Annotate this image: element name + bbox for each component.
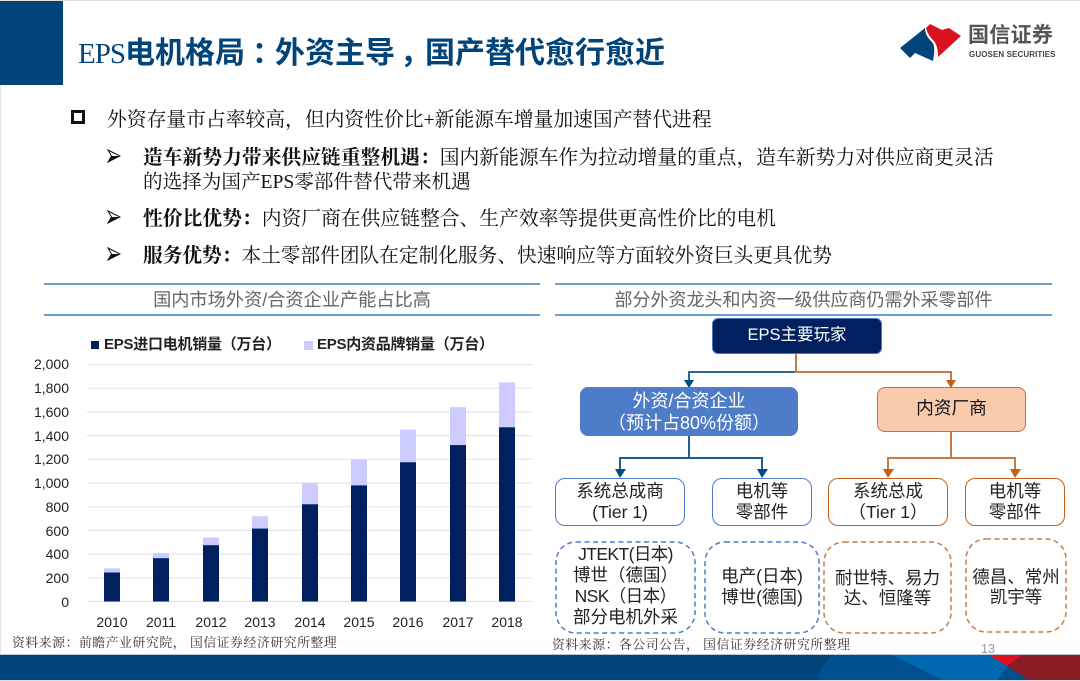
dashed box: domestic tier 1 suppliers: 耐世特、易力 <box>835 568 940 588</box>
y axis labels: 1,200 <box>34 451 69 467</box>
footer band <box>0 654 1080 681</box>
dashed box: foreign tier 1 suppliers: 部分电机外采 <box>573 607 678 627</box>
domestic brand bars <box>104 382 515 602</box>
sub-bullet 1 text: 造车新势力带来供应链重整机遇：国内新能源车作为拉动增量的重点，造车新势力对供应商更灵活 <box>143 147 994 169</box>
box: motor parts domestic: 电机等 <box>989 481 1041 501</box>
dashed box: foreign tier 1 suppliers: NSK（日本） <box>575 586 676 606</box>
box: EPS main players: EPS主要玩家 <box>747 326 847 344</box>
chart legend <box>91 335 494 353</box>
dashed box: domestic motor suppliers <box>965 538 1067 633</box>
dashed box: foreign motor suppliers: 电产(日本) <box>721 566 803 586</box>
x axis labels <box>96 614 523 630</box>
dashed box: foreign motor suppliers: 博世(德国) <box>721 587 803 607</box>
main bullet text: 外资存量市占率较高，但内资性价比+新能源车增量加速国产替代进程 <box>107 109 712 131</box>
sub-bullet 1 arrow <box>107 149 121 163</box>
y axis labels: 200 <box>46 570 69 586</box>
box: system integrator tier 1 foreign <box>555 478 685 526</box>
x axis labels: 2011 <box>146 614 176 630</box>
x axis labels: 2014 <box>294 614 326 630</box>
chart gridlines <box>87 364 532 602</box>
x axis labels: 2015 <box>343 614 375 630</box>
box: domestic makers <box>877 387 1026 432</box>
title: ： <box>252 28 282 72</box>
logo subtitle: GUOSEN SECURITIES <box>969 50 1056 59</box>
y axis labels: 600 <box>46 523 69 539</box>
arrowheads <box>615 380 1021 478</box>
box: foreign and joint ventures: （预计占80%份额） <box>608 413 770 433</box>
y axis labels: 0 <box>61 594 69 610</box>
imported motor bars <box>104 427 515 602</box>
y axis labels: 400 <box>46 546 69 562</box>
title: ， <box>400 28 430 72</box>
box: system integrator tier 1 domestic: 系统总成 <box>853 481 923 501</box>
sub-bullet 1 text: 的选择为国产EPS零部件替代带来机遇 <box>143 172 471 193</box>
title: EPS电机格局 外资主导 国产替代愈行愈近 <box>78 28 665 72</box>
box: motor parts foreign <box>712 478 812 526</box>
chart legend: EPS进口电机销量（万台） <box>104 335 281 353</box>
dashed box: domestic tier 1 suppliers <box>823 541 952 634</box>
sub-bullet 2 arrow <box>107 210 121 224</box>
box: foreign and joint ventures: 外资/合资企业 <box>632 391 746 411</box>
header blue block <box>0 1 63 85</box>
box: motor parts domestic: 零部件 <box>989 502 1041 522</box>
x axis labels: 2010 <box>96 614 128 630</box>
sub-bullet 1 text <box>143 146 994 193</box>
y axis labels: 1,800 <box>34 380 69 396</box>
connector: top to foreign <box>689 372 796 387</box>
connector: foreign to children <box>620 435 762 474</box>
right source note: 资料来源：各公司公告， 国信证券经济研究所整理 <box>552 638 851 652</box>
y axis labels: 2,000 <box>34 356 69 372</box>
box: system integrator tier 1 foreign: 系统总成商 <box>576 481 664 501</box>
box: system integrator tier 1 foreign: (Tier 1) <box>592 502 648 522</box>
stacked bar chart <box>34 335 532 630</box>
right panel heading <box>555 283 1052 316</box>
dashed box: domestic tier 1 suppliers: 达、恒隆等 <box>844 588 931 608</box>
dashed box: foreign tier 1 suppliers <box>555 541 696 634</box>
logo wordmark: 国信证券 <box>968 24 1053 47</box>
x axis labels: 2012 <box>195 614 227 630</box>
connector: top to domestic <box>796 353 951 387</box>
y axis labels: 1,600 <box>34 404 69 420</box>
left panel heading <box>44 283 540 316</box>
chart legend: EPS内资品牌销量（万台） <box>317 335 494 353</box>
x axis labels: 2016 <box>392 614 424 630</box>
y axis labels: 1,400 <box>34 428 69 444</box>
left source note: 资料来源：前瞻产业研究院， 国信证券经济研究所整理 <box>12 636 337 650</box>
sub-bullet 3 text: 服务优势：本土零部件团队在定制化服务、快速响应等方面较外资巨头更具优势 <box>143 245 832 267</box>
box: motor parts foreign: 电机等 <box>736 481 788 501</box>
left panel heading: 国内市场外资/合资企业产能占比高 <box>153 290 431 310</box>
page number: 13 <box>981 642 995 656</box>
connector: domestic to children <box>888 431 1015 474</box>
box: EPS main players <box>712 318 882 354</box>
box: motor parts foreign: 零部件 <box>736 502 788 522</box>
y axis labels: 800 <box>46 499 69 515</box>
box: system integrator tier 1 domestic <box>828 478 948 526</box>
logo <box>900 24 1056 61</box>
dashed box: foreign tier 1 suppliers: 博世（德国） <box>573 565 678 585</box>
box: system integrator tier 1 domestic: （Tier 1） <box>848 502 928 522</box>
x axis labels: 2013 <box>244 614 276 630</box>
main bullet icon <box>71 110 85 124</box>
sub-bullet 3 arrow <box>107 247 121 261</box>
dashed box: foreign tier 1 suppliers: JTEKT(日本) <box>578 544 673 564</box>
y axis labels: 1,000 <box>34 475 69 491</box>
right panel heading: 部分外资龙头和内资一级供应商仍需外采零部件 <box>614 290 992 310</box>
sub-bullet 2 text: 性价比优势：内资厂商在供应链整合、生产效率等提供更高性价比的电机 <box>143 208 776 230</box>
box: foreign and joint ventures <box>580 387 798 436</box>
dashed box: domestic motor suppliers: 凯宇等 <box>990 587 1042 607</box>
dashed box: foreign motor suppliers <box>704 541 820 634</box>
box: motor parts domestic <box>965 478 1065 526</box>
dashed box: domestic motor suppliers: 德昌、常州 <box>972 567 1060 587</box>
flowchart connectors <box>615 354 1021 478</box>
x axis labels: 2018 <box>491 614 523 630</box>
box: domestic makers: 内资厂商 <box>916 398 987 418</box>
x axis labels: 2017 <box>442 614 474 630</box>
y axis labels <box>34 356 69 610</box>
